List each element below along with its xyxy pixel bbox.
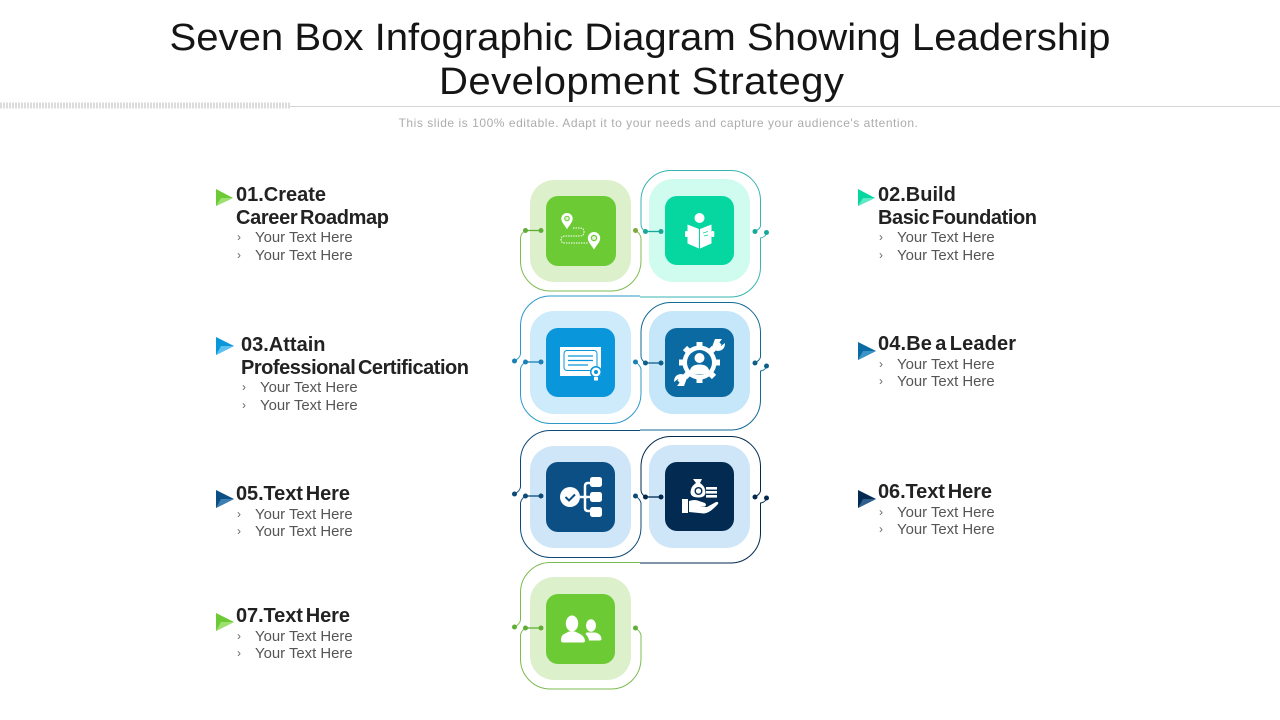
subtitle: This slide is 100% editable. Adapt it to your needs and capture your audience's attention. [399, 116, 918, 130]
text block: 06 text here: Your Text Here [897, 505, 995, 521]
title: Development Strategy [439, 61, 844, 103]
text block: 05 text here: Your Text Here [255, 524, 353, 540]
text block: 06 text here: Your Text Here [897, 522, 995, 538]
title [170, 17, 1110, 103]
panel: box 1 create career roadmap [520, 180, 641, 291]
icon: two people [561, 616, 602, 642]
text block: 04 be a leader: Your Text Here [897, 374, 995, 390]
text block: 04 be a leader: › [879, 357, 883, 371]
text block: 02 build basic foundation: Your Text Here [897, 248, 995, 264]
text block: 01 create career roadmap: › [237, 248, 241, 262]
text block: 01 create career roadmap: Your Text Here [255, 230, 353, 246]
panel: box 4 be a leader [640, 302, 769, 430]
text block: 06 text here: › [879, 522, 883, 536]
text block: 07 text here: › [237, 629, 241, 643]
text block: 02 build basic foundation: Basic Foundation [878, 207, 1037, 229]
text block: 01 create career roadmap: 01.Create [236, 184, 326, 206]
text block: 07 text here [216, 605, 353, 662]
text block: 02 build basic foundation: › [879, 248, 883, 262]
text block: 02 build basic foundation: 02.Build [878, 184, 956, 206]
icon: arrow 07 [216, 613, 234, 631]
icon: arrow 02 [858, 189, 875, 206]
text block: 05 text here [216, 483, 353, 540]
text block: 03 attain professional certification: › [242, 398, 246, 412]
text block: 03 attain professional certification: › [242, 380, 246, 394]
text block: 04 be a leader: › [879, 374, 883, 388]
text block: 02 build basic foundation: › [879, 230, 883, 244]
panel: box 2 build basic foundation [640, 170, 769, 297]
text block: 02 build basic foundation [858, 184, 1037, 264]
panel: box 7 text here [512, 562, 641, 689]
icon: arrow 05 [216, 490, 234, 508]
text block: 03 attain professional certification: Professional Certification [241, 357, 469, 379]
text block: 05 text here: › [237, 524, 241, 538]
icon: route with map pins [561, 213, 600, 250]
icon: arrow 01 [216, 189, 233, 206]
icon: arrow 04 [858, 342, 876, 360]
text block: 04 be a leader: 04.Be a Leader [878, 333, 1016, 355]
text block: 04 be a leader: Your Text Here [897, 357, 995, 373]
text block: 01 create career roadmap: › [237, 230, 241, 244]
icon: certificate [560, 347, 602, 380]
panel: box 5 text here [512, 430, 641, 558]
text block: 07 text here: › [237, 646, 241, 660]
text block: 06 text here [858, 481, 995, 538]
text block: 05 text here: 05.Text Here [236, 483, 350, 505]
text block: 05 text here: › [237, 507, 241, 521]
title: Seven Box Infographic Diagram Showing Leadership [170, 17, 1110, 59]
text block: 06 text here: › [879, 505, 883, 519]
text block: 01 create career roadmap: Career Roadmap [236, 207, 389, 229]
icon: hand holding money bag [682, 479, 718, 514]
panel: box 3 attain professional certification [512, 296, 641, 424]
text block: 03 attain professional certification: Your Text Here [260, 380, 358, 396]
text block: 03 attain professional certification: Your Text Here [260, 398, 358, 414]
icon: gear with person and wrench [674, 339, 725, 386]
text block: 02 build basic foundation: Your Text Here [897, 230, 995, 246]
text block: 06 text here: 06.Text Here [878, 481, 992, 503]
text block: 01 create career roadmap [216, 184, 389, 264]
text block: 03 attain professional certification [216, 334, 469, 414]
icon: person reading book [685, 213, 714, 248]
panel: box 6 text here [640, 436, 769, 563]
text block: 01 create career roadmap: Your Text Here [255, 248, 353, 264]
text block: 07 text here: 07.Text Here [236, 605, 350, 627]
text block: 07 text here: Your Text Here [255, 646, 353, 662]
icon: arrow 03 [216, 337, 234, 355]
text block: 05 text here: Your Text Here [255, 507, 353, 523]
icon: hierarchy with check mark [560, 477, 602, 517]
text block: 04 be a leader [858, 333, 1016, 390]
icon: arrow 06 [858, 490, 876, 508]
text block: 03 attain professional certification: 03.Attain [241, 334, 325, 356]
text block: 07 text here: Your Text Here [255, 629, 353, 645]
